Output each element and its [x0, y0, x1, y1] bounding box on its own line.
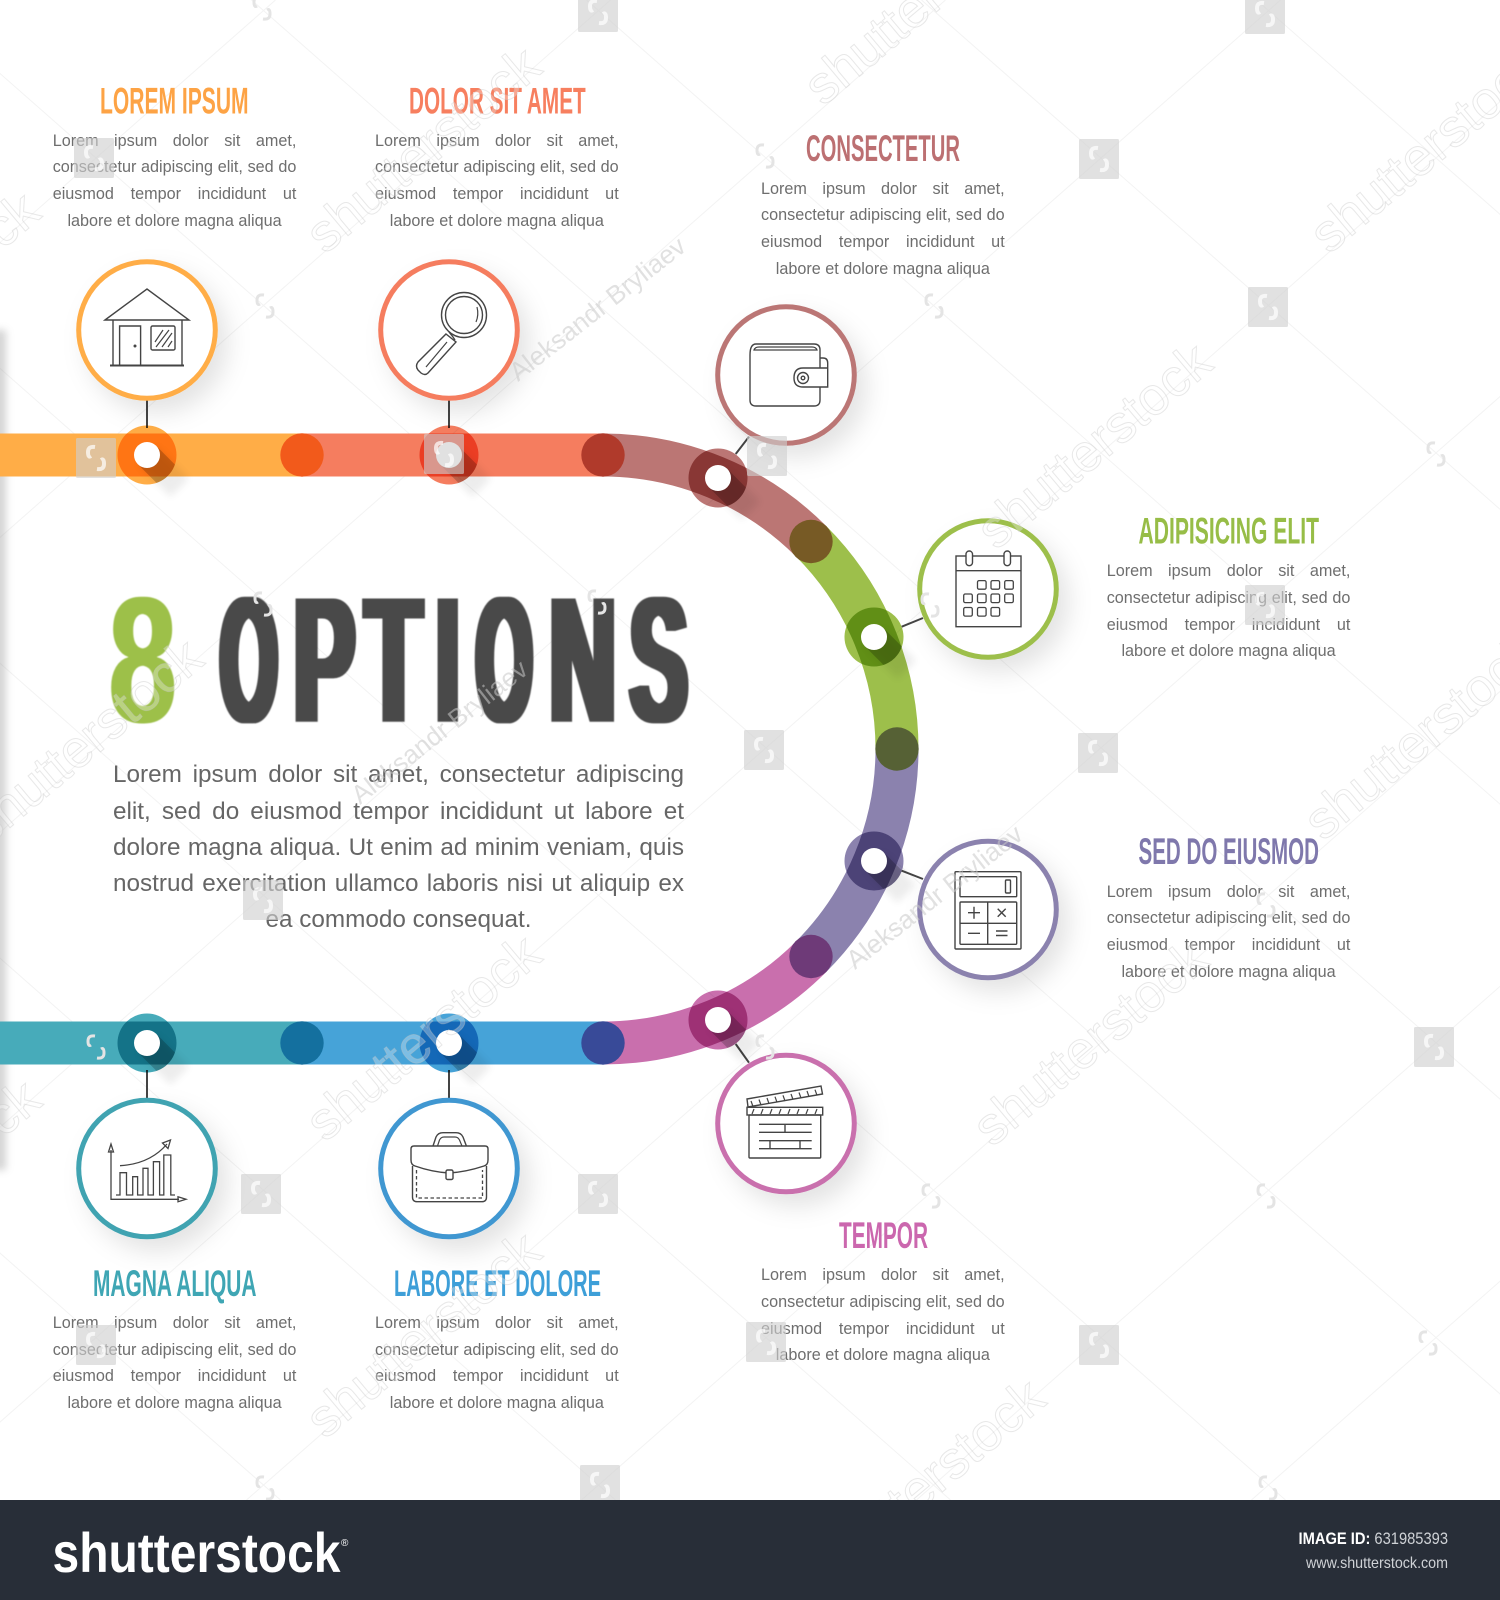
icon circle: calculator — [920, 841, 1056, 978]
text block: Consectetur — [761, 180, 1005, 278]
watermark text: shutterstock — [962, 928, 1219, 1157]
watermark text: shutterstock — [295, 35, 552, 264]
text block: Magna Aliqua: consectetur adipiscing elit, sed do — [53, 1341, 296, 1359]
text block: Consectetur: eiusmod tempor incididunt ut — [761, 233, 1005, 251]
track segment: purple — [811, 749, 897, 957]
text block: Labore Et Dolore: consectetur adipiscing elit, sed do — [375, 1341, 619, 1359]
heading: Adipisicing Elit: ADIPISICING ELIT — [1138, 510, 1319, 552]
text block: Lorem Ipsum: eiusmod tempor incididunt ut — [53, 185, 296, 203]
title: 8 OPTIONS — [109, 560, 687, 760]
timeline node: rose — [688, 448, 760, 520]
watermark author: Aleksandr Bryliaev — [345, 654, 533, 810]
text block: Lorem Ipsum — [53, 132, 296, 230]
text block: Consectetur: consectetur adipiscing elit, sed do — [761, 206, 1005, 224]
heading: Dolor Sit Amet: DOLOR SIT AMET — [409, 80, 586, 121]
text block: Lorem Ipsum: consectetur adipiscing elit, sed do — [53, 158, 296, 176]
text block: Labore Et Dolore — [375, 1314, 619, 1412]
icon circle: growth chart — [79, 1100, 215, 1237]
text block: Lorem Ipsum: Lorem ipsum dolor sit amet, — [53, 132, 296, 150]
timeline node: orange — [118, 426, 189, 497]
footer bar — [0, 1500, 1500, 1600]
text block: Lorem Ipsum: labore et dolore magna aliqua — [67, 212, 282, 230]
timeline node: pink — [688, 990, 760, 1062]
watermark text: shutterstock — [966, 331, 1223, 560]
text block: Magna Aliqua: Lorem ipsum dolor sit amet, — [53, 1314, 296, 1332]
timeline node: blue — [420, 1014, 491, 1085]
main paragraph: nostrud exercitation ullamco laboris nisi ut aliquip ex — [113, 870, 684, 897]
text block: Magna Aliqua: eiusmod tempor incididunt ut — [53, 1367, 296, 1385]
watermark text: shutterstock — [295, 1220, 552, 1449]
text block: Labore Et Dolore: eiusmod tempor incididunt ut — [375, 1367, 619, 1385]
heading: Magna Aliqua: MAGNA ALIQUA — [93, 1263, 256, 1304]
text block: Sed Do Eiusmod: eiusmod tempor incididunt ut — [1107, 936, 1350, 954]
timeline node: salmon — [420, 426, 491, 497]
icon circle: house — [79, 262, 215, 398]
footer image id: IMAGE ID: 631985393 — [1298, 1529, 1448, 1548]
heading: Consectetur: CONSECTETUR — [806, 128, 960, 169]
title word OPTIONS: N — [550, 560, 616, 760]
heading: Tempor: TEMPOR — [839, 1215, 928, 1256]
text block: Adipisicing Elit: consectetur adipiscing elit, sed do — [1107, 589, 1350, 607]
watermark text: shutterstock — [799, 1367, 1056, 1596]
title word OPTIONS: T — [366, 560, 421, 760]
track segment: salmon — [302, 434, 603, 476]
text block: Sed Do Eiusmod: consectetur adipiscing elit, sed do — [1107, 909, 1350, 927]
text block: Sed Do Eiusmod: Lorem ipsum dolor sit amet, — [1107, 883, 1350, 901]
watermark text: shutterstock — [295, 923, 552, 1152]
timeline node: green — [844, 608, 916, 679]
icon circle: calendar — [920, 521, 1056, 657]
segment junction dots — [280, 433, 919, 1065]
main paragraph — [113, 761, 684, 933]
text block: Adipisicing Elit: Lorem ipsum dolor sit amet, — [1107, 562, 1350, 580]
footer url: www.shutterstock.com — [1305, 1555, 1448, 1572]
title word OPTIONS: O — [220, 560, 277, 760]
timeline node: teal — [118, 1014, 189, 1085]
text block: Tempor: labore et dolore magna aliqua — [776, 1346, 990, 1364]
timeline track — [0, 455, 897, 1043]
text block: Labore Et Dolore: labore et dolore magna aliqua — [390, 1394, 604, 1412]
icon circle: magnifier — [381, 262, 517, 398]
title number 8: 8 — [109, 560, 176, 760]
main paragraph: elit, sed do eiusmod tempor incididunt ut labore et — [113, 798, 684, 825]
title word OPTIONS: O — [476, 560, 532, 760]
text block: Magna Aliqua — [53, 1314, 296, 1412]
footer logo: shutterstock — [52, 1521, 341, 1584]
text: S — [630, 560, 687, 760]
title word OPTIONS: P — [294, 560, 355, 760]
heading: Lorem Ipsum: LOREM IPSUM — [100, 80, 249, 121]
track segment: blue — [302, 1022, 603, 1064]
step headings — [93, 80, 1319, 1304]
watermark author: Aleksandr Bryliaev — [503, 231, 691, 387]
main paragraph: dolore magna aliqua. Ut enim ad minim veniam, quis — [113, 834, 684, 861]
text block: Adipisicing Elit — [1107, 562, 1350, 660]
text block: Dolor Sit Amet — [375, 132, 619, 230]
main paragraph: Lorem ipsum dolor sit amet, consectetur adipiscing — [113, 761, 684, 788]
track segment: teal — [0, 1022, 302, 1064]
track segment: orange — [0, 434, 302, 476]
track segment: rose — [603, 455, 811, 541]
icon circle: clapperboard — [718, 1055, 854, 1192]
text block: Consectetur: Lorem ipsum dolor sit amet, — [761, 180, 1005, 198]
text block: Tempor: eiusmod tempor incididunt ut — [761, 1320, 1005, 1338]
icon circle: wallet — [718, 307, 854, 443]
text block: Dolor Sit Amet: Lorem ipsum dolor sit amet, — [375, 132, 619, 150]
heading: Sed Do Eiusmod: SED DO EIUSMOD — [1138, 831, 1319, 872]
text block: Consectetur: labore et dolore magna aliqua — [776, 260, 990, 278]
text block: Tempor: Lorem ipsum dolor sit amet, — [761, 1266, 1005, 1284]
track segment: pink — [603, 957, 811, 1043]
timeline node: purple — [844, 832, 916, 903]
title word OPTIONS — [220, 560, 687, 760]
icon circle: briefcase — [381, 1100, 517, 1237]
footer registered mark: ® — [341, 1538, 349, 1549]
title word OPTIONS: I — [437, 560, 459, 760]
text block: Magna Aliqua: labore et dolore magna aliqua — [67, 1394, 282, 1412]
text block: Sed Do Eiusmod: labore et dolore magna aliqua — [1121, 963, 1336, 981]
text block: Tempor: consectetur adipiscing elit, sed do — [761, 1293, 1005, 1311]
text block: Labore Et Dolore: Lorem ipsum dolor sit amet, — [375, 1314, 619, 1332]
connector lines — [147, 400, 923, 1098]
text block: Dolor Sit Amet: consectetur adipiscing elit, sed do — [375, 158, 619, 176]
text block: Dolor Sit Amet: labore et dolore magna aliqua — [390, 212, 604, 230]
text block: Dolor Sit Amet: eiusmod tempor incididunt ut — [375, 185, 619, 203]
text block: Adipisicing Elit: eiusmod tempor incididunt ut — [1107, 616, 1350, 634]
watermark author: Aleksandr Bryliaev — [840, 819, 1028, 975]
main paragraph: ea commodo consequat. — [265, 906, 532, 933]
track segment: green — [811, 541, 897, 749]
text block: Tempor — [761, 1266, 1005, 1364]
text block: Adipisicing Elit: labore et dolore magna aliqua — [1121, 642, 1336, 660]
heading: Labore Et Dolore: LABORE ET DOLORE — [394, 1263, 601, 1304]
watermark author — [345, 231, 1028, 975]
text block: Sed Do Eiusmod — [1107, 883, 1350, 981]
left edge shadow — [0, 330, 6, 1170]
